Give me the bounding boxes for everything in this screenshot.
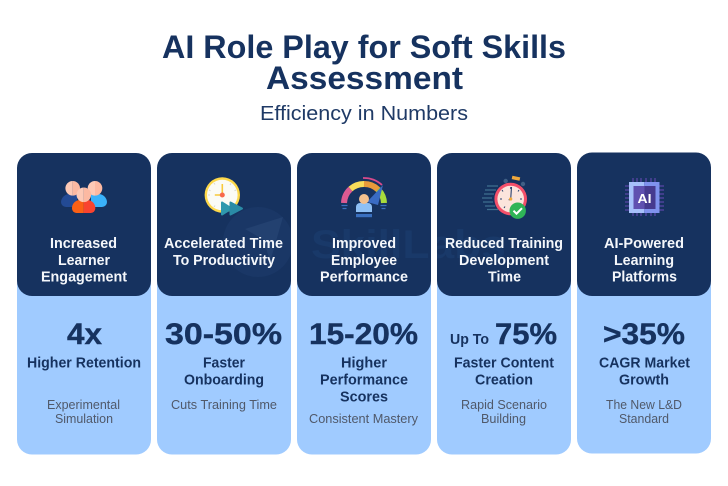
label: higher performance scores: Higher <box>341 354 387 372</box>
panel: learner engagement <box>17 153 151 454</box>
statistic: 30-50%: 30-50% <box>165 318 282 351</box>
heading: AI-Powered <box>604 235 684 252</box>
icon: AI chip <box>625 178 664 216</box>
title: Assessment <box>266 60 463 96</box>
heading: employee performance <box>320 235 408 286</box>
watermark logo: SkillLabs <box>311 223 506 267</box>
heading: training development time: Time <box>488 268 521 286</box>
label: faster onboarding: Onboarding <box>184 372 264 388</box>
statistic: >35% <box>603 318 685 351</box>
icon: stopwatch with check <box>482 176 527 219</box>
heading <box>41 235 127 286</box>
icon: clock with fast forward <box>205 177 242 214</box>
note: Standard <box>619 412 669 426</box>
panel: time to productivity <box>157 153 291 454</box>
statistic: 4x <box>67 318 102 351</box>
panel: training development time <box>437 153 571 454</box>
panel: AI learning platforms <box>577 152 711 454</box>
heading: Learner <box>58 252 110 269</box>
heading: Engagement <box>41 268 127 286</box>
heading: Increased <box>50 235 117 252</box>
note: rapid scenario building <box>461 398 547 426</box>
statistic: 15-20%: 15-20% <box>309 318 418 351</box>
subtitle: Efficiency in Numbers <box>260 102 468 125</box>
statistic: up to 75%: Up To <box>450 332 489 348</box>
note: consistent mastery: Consistent Mastery <box>309 412 419 426</box>
label: faster onboarding <box>184 354 264 388</box>
note: The New L&D <box>606 398 682 412</box>
heading: training development time <box>445 235 563 286</box>
label: higher performance scores: Scores <box>340 388 388 406</box>
heading: employee performance: Improved <box>332 235 396 252</box>
note <box>606 398 682 426</box>
label: higher performance scores <box>320 354 408 406</box>
label: faster content creation <box>454 354 554 388</box>
note <box>47 398 120 426</box>
icon: performance gauge <box>342 178 386 217</box>
label <box>599 354 690 388</box>
title <box>162 29 566 96</box>
label: Higher Retention <box>27 354 141 372</box>
statistic: up to 75% <box>450 318 557 351</box>
panel: employee performance <box>297 153 431 454</box>
note: cuts training time: Cuts Training Time <box>171 398 277 412</box>
heading: training development time: Development <box>459 252 549 269</box>
heading: Learning <box>614 252 674 269</box>
label: Growth <box>619 372 669 388</box>
heading: time to productivity: To Productivity <box>173 252 276 269</box>
note: rapid scenario building: Rapid Scenario <box>461 398 547 412</box>
label: faster onboarding: Faster <box>203 354 245 372</box>
label: higher performance scores: Performance <box>320 372 408 388</box>
icon: AI chip: AI <box>638 191 652 206</box>
label: faster content creation: Creation <box>475 372 533 388</box>
title: AI Role Play for Soft Skills <box>162 29 566 65</box>
heading: time to productivity <box>164 235 283 269</box>
statistic: up to 75%: 75% <box>495 318 557 351</box>
heading: time to productivity: Accelerated Time <box>164 235 283 252</box>
label: faster content creation: Faster Content <box>454 354 554 372</box>
icon: group of people <box>61 181 107 213</box>
heading: employee performance: Employee <box>331 252 397 269</box>
heading: employee performance: Performance <box>320 268 408 286</box>
heading: Platforms <box>612 268 677 286</box>
label: CAGR Market <box>599 354 690 372</box>
heading <box>604 235 684 286</box>
note: rapid scenario building: Building <box>481 412 526 426</box>
heading: training development time: Reduced Training <box>445 235 563 252</box>
note: Experimental <box>47 398 120 412</box>
watermark logo <box>245 217 504 260</box>
note: Simulation <box>55 412 113 426</box>
